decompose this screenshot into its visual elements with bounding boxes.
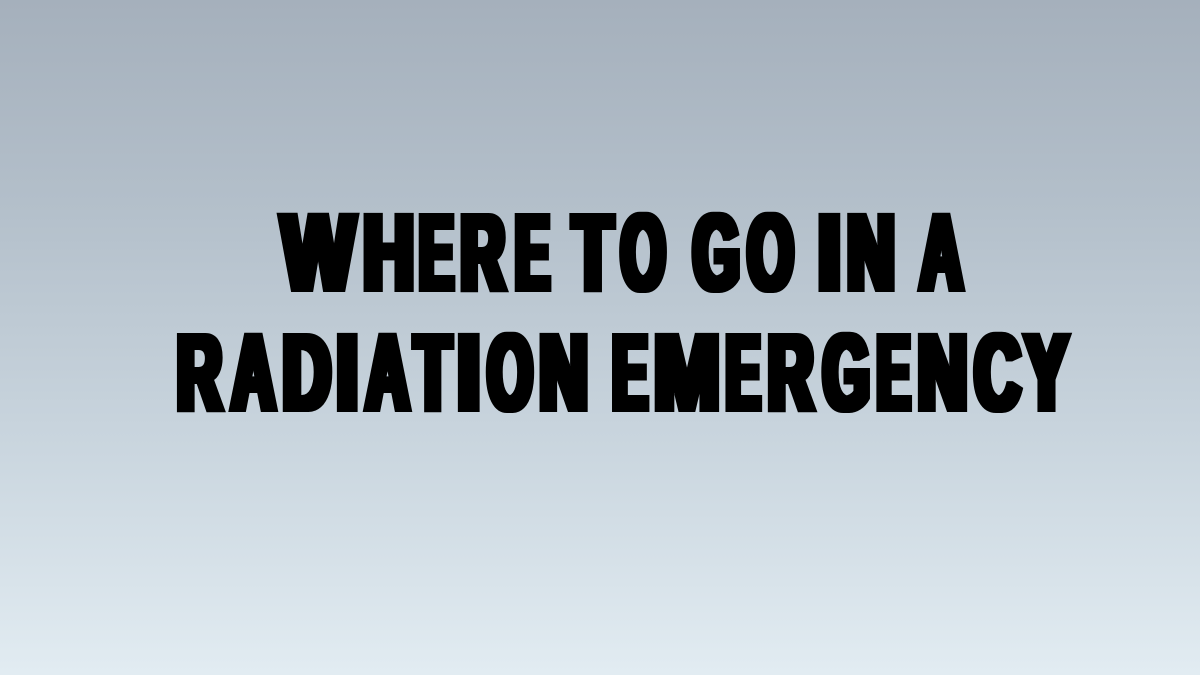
title line 2: Y <box>1025 312 1068 432</box>
title line 1: E <box>516 192 549 312</box>
title line 2: O <box>488 312 532 432</box>
title line 2: A <box>366 312 409 432</box>
title line 1: T <box>573 192 612 312</box>
title line 2: E <box>726 312 760 432</box>
title line 1: O <box>621 192 665 312</box>
title line 2: C <box>975 312 1020 432</box>
title line 2: M <box>654 312 720 432</box>
title line 2: R <box>768 312 813 432</box>
title line 2: R <box>177 312 222 432</box>
title line 2: A <box>232 312 275 432</box>
title line 2: T <box>415 312 451 432</box>
title line 1: N <box>847 192 895 312</box>
title line 2: E <box>613 312 647 432</box>
title line 1: G <box>693 192 739 312</box>
title line 2: I <box>457 312 480 432</box>
title line 2: N <box>540 312 588 432</box>
title line 1: E <box>420 192 453 312</box>
title line 2: D <box>283 312 331 432</box>
title line 1: R <box>461 192 505 312</box>
title <box>177 192 1068 432</box>
title line 2: N <box>918 312 967 432</box>
title line 2: E <box>877 312 910 432</box>
title line 1: A <box>920 192 962 312</box>
title line 1: W <box>282 192 355 312</box>
title line 2: G <box>823 312 869 432</box>
title line 1: O <box>748 192 793 312</box>
title line 1: I <box>818 192 841 312</box>
title line 2: I <box>336 312 358 432</box>
title line 1: H <box>364 192 414 312</box>
